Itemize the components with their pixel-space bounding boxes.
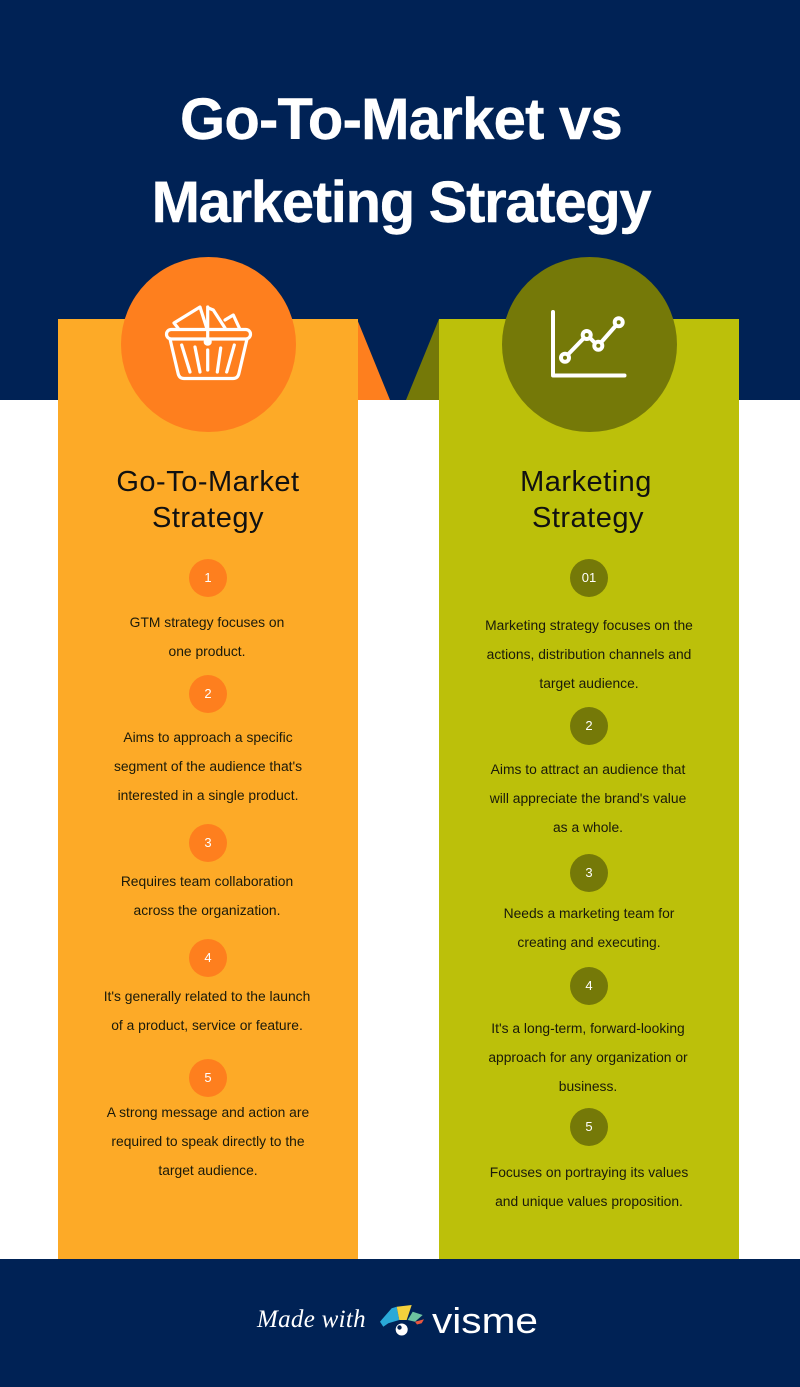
badge 4 right xyxy=(570,967,608,1005)
icon: line chart xyxy=(502,257,677,432)
heading: marketing strategy: Marketing xyxy=(520,466,652,498)
text 1 right: target audience. xyxy=(539,675,639,691)
panel fold: right xyxy=(406,319,439,400)
badge 2 left xyxy=(189,675,227,713)
title: Marketing Strategy xyxy=(152,170,650,235)
text 4 right: It's a long-term, forward-looking xyxy=(491,1020,685,1036)
text 5 left: A strong message and action are xyxy=(107,1104,309,1120)
text 2 right: will appreciate the brand's value xyxy=(490,790,686,806)
visme logo: visme xyxy=(432,1301,538,1341)
badge 5 left xyxy=(189,1059,227,1097)
badge 2 left: 2 xyxy=(204,686,212,701)
panel fold: left xyxy=(358,322,390,400)
panel: go-to-market strategy xyxy=(58,319,358,1259)
text 5 right xyxy=(490,1164,688,1209)
text 2 left: segment of the audience that's xyxy=(114,758,302,774)
text 5 left: target audience. xyxy=(158,1162,258,1178)
badge 1 left xyxy=(189,559,227,597)
badge 3 left: 3 xyxy=(204,835,212,850)
text 5 left xyxy=(106,1104,309,1178)
text 1 left: one product. xyxy=(169,643,245,659)
text 1 right: Marketing strategy focuses on the xyxy=(485,617,693,633)
title xyxy=(152,87,652,235)
text 2 right: Aims to attract an audience that xyxy=(491,761,685,777)
text 2 right: as a whole. xyxy=(553,819,623,835)
badge 5 right xyxy=(570,1108,608,1146)
badge 1 right: 01 xyxy=(582,570,596,585)
text 3 right: Needs a marketing team for xyxy=(504,905,674,921)
heading: marketing strategy xyxy=(520,466,652,534)
text 4 right: approach for any organization or xyxy=(488,1049,688,1065)
header background xyxy=(0,0,800,400)
text 3 left: across the organization. xyxy=(134,902,280,918)
badge 5 right: 5 xyxy=(585,1119,593,1134)
text 2 left: Aims to approach a specific xyxy=(123,729,293,745)
text 4 left xyxy=(104,988,310,1033)
text 4 right xyxy=(488,1020,688,1094)
text 4 left: It's generally related to the launch xyxy=(104,988,310,1004)
badge 2 right: 2 xyxy=(585,718,593,733)
text 3 right: creating and executing. xyxy=(517,934,661,950)
text 5 left: required to speak directly to the xyxy=(111,1133,305,1149)
text 3 left: Requires team collaboration xyxy=(121,873,293,889)
badge 2 right xyxy=(570,707,608,745)
text 4 left: of a product, service or feature. xyxy=(111,1017,303,1033)
visme logo xyxy=(380,1301,538,1341)
badge 4 right: 4 xyxy=(585,978,593,993)
heading: go-to-market strategy: Strategy xyxy=(152,502,264,534)
text 5 right: and unique values proposition. xyxy=(495,1193,683,1209)
text 3 left xyxy=(121,873,293,918)
badge 4 left xyxy=(189,939,227,977)
text 2 left: interested in a single product. xyxy=(118,787,298,803)
text 1 right xyxy=(485,617,693,691)
badge 3 right: 3 xyxy=(585,865,593,880)
text 4 right: business. xyxy=(559,1078,617,1094)
heading: go-to-market strategy: Go-To-Market xyxy=(116,466,300,498)
badge 1 left: 1 xyxy=(204,570,212,585)
footer background xyxy=(0,1259,800,1387)
text 2 right xyxy=(490,761,686,835)
title: Go-To-Market vs xyxy=(180,87,622,152)
badge 3 right xyxy=(570,854,608,892)
text 5 right: Focuses on portraying its values xyxy=(490,1164,688,1180)
panel: marketing strategy xyxy=(439,319,739,1259)
text 3 right xyxy=(504,905,674,950)
badge 4 left: 4 xyxy=(204,950,212,965)
icon: shopping basket xyxy=(121,257,296,432)
heading: go-to-market strategy xyxy=(116,466,300,534)
badge 3 left xyxy=(189,824,227,862)
badge 5 left: 5 xyxy=(204,1070,212,1085)
made with label: Made with xyxy=(257,1306,366,1333)
heading: marketing strategy: Strategy xyxy=(532,502,644,534)
text 2 left xyxy=(114,729,302,803)
text 1 left xyxy=(130,614,284,659)
text 1 right: actions, distribution channels and xyxy=(487,646,691,662)
text 1 left: GTM strategy focuses on xyxy=(130,614,284,630)
badge 1 right xyxy=(570,559,608,597)
footer: made with visme xyxy=(256,1301,538,1341)
